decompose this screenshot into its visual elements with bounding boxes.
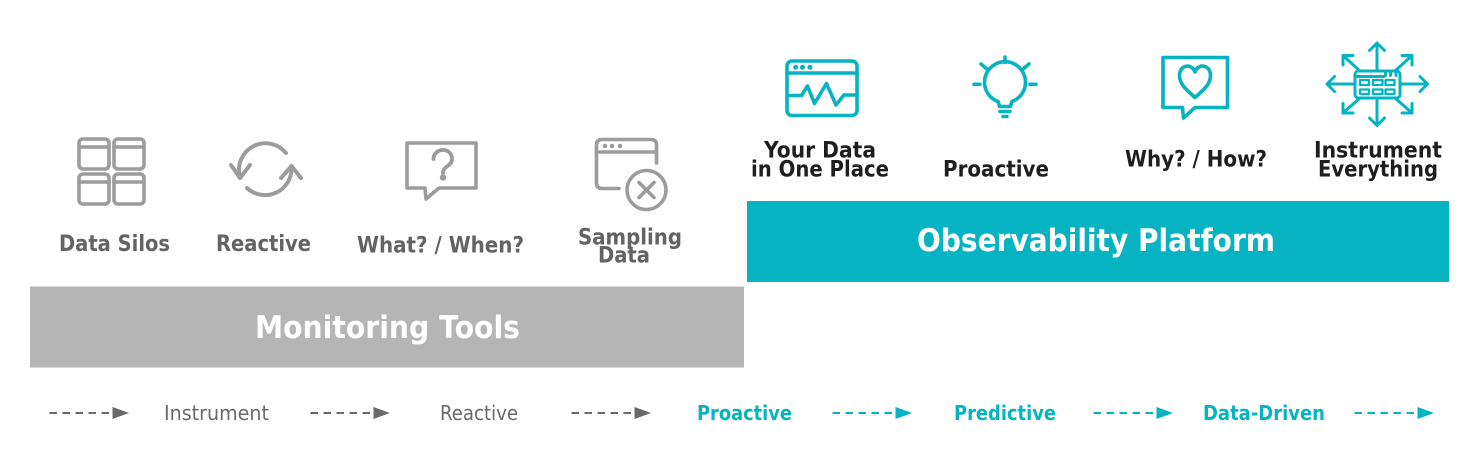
arrow: dashed grey 3	[572, 407, 651, 419]
icon: reactive cycle arrows	[231, 143, 301, 195]
arrow: dashed teal 3	[1354, 407, 1434, 419]
label: sampling data	[578, 226, 682, 268]
label: your data in one place: Your Data	[763, 138, 876, 164]
timeline label: proactive: Proactive	[697, 401, 792, 425]
label: instrument everything: Instrument	[1314, 138, 1442, 164]
panel: monitoring tools banner	[30, 286, 744, 368]
label: sampling data: Sampling	[578, 226, 682, 250]
icon: your data in one place window with pulse	[787, 61, 857, 116]
icon: question speech bubble	[407, 143, 476, 199]
timeline label: reactive: Reactive	[440, 401, 518, 425]
icon: proactive light bulb	[974, 57, 1036, 116]
label: why how: Why? / How?	[1125, 148, 1267, 172]
arrow: dashed grey 2	[310, 407, 390, 419]
label: reactive: Reactive	[216, 232, 311, 257]
icon: instrument everything panel with radiating arrows	[1327, 43, 1428, 126]
panel: observability platform banner	[747, 201, 1449, 282]
icon: sampling data window with x	[596, 140, 666, 210]
timeline label: predictive: Predictive	[954, 401, 1056, 425]
arrow: dashed teal 2	[1094, 407, 1173, 419]
label: data silos: Data Silos	[59, 232, 170, 257]
timeline label: data-driven: Data-Driven	[1203, 401, 1325, 425]
label: what / when: What? / When?	[357, 234, 524, 258]
panel: monitoring tools banner: Monitoring Tools	[255, 310, 520, 346]
label: your data in one place	[751, 138, 889, 182]
timeline label: instrument: Instrument	[164, 401, 269, 425]
panel: observability platform banner: Observability Platform	[917, 223, 1275, 259]
label: sampling data: Data	[598, 244, 650, 268]
icon: data silos	[79, 139, 144, 204]
icon: why how heart speech bubble	[1163, 58, 1228, 118]
arrow: dashed teal 1	[832, 407, 912, 419]
label: instrument everything: Everything	[1318, 158, 1438, 182]
label: your data in one place: in One Place	[751, 158, 889, 182]
arrow: dashed grey 1	[50, 407, 129, 419]
label: instrument everything	[1314, 138, 1442, 182]
label: proactive: Proactive	[943, 158, 1049, 182]
